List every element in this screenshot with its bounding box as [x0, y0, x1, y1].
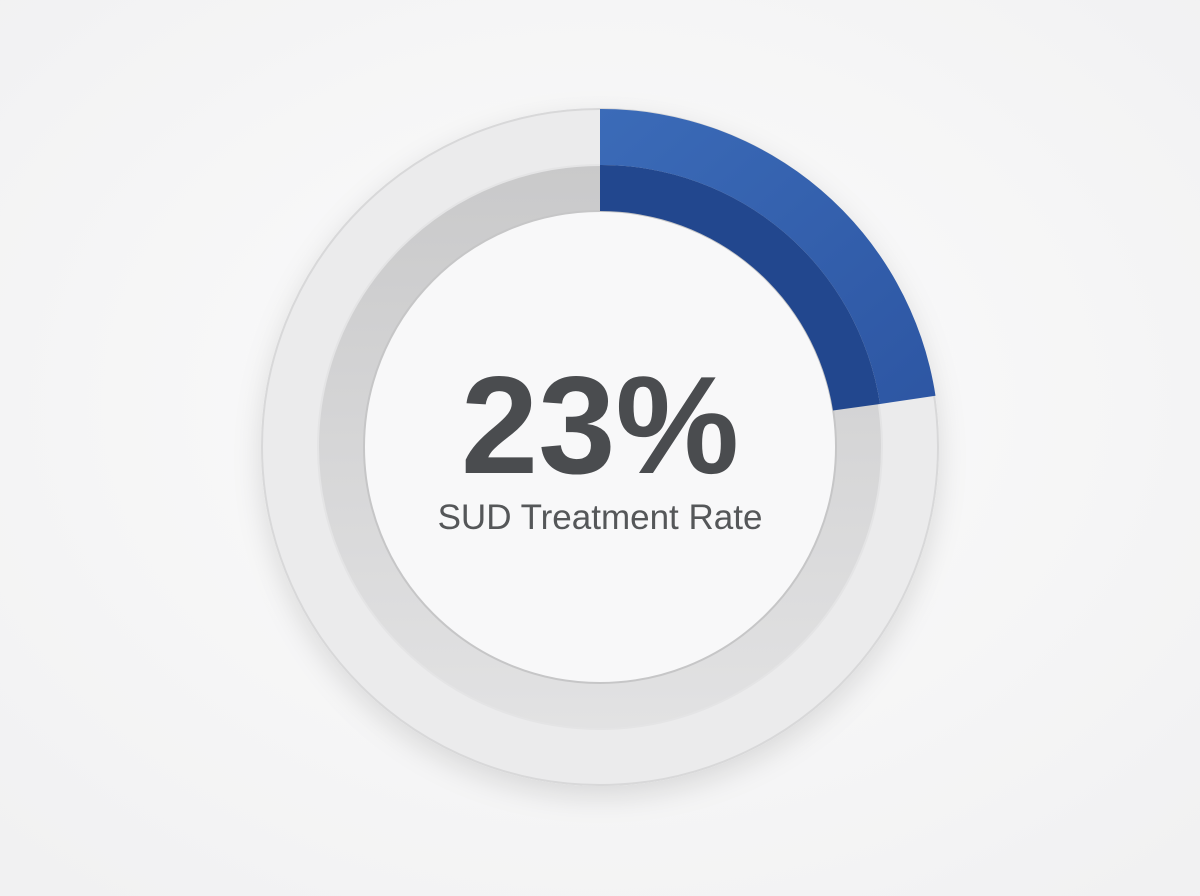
label: SUD Treatment Rate [438, 498, 762, 537]
percentage value: 23% [461, 348, 739, 503]
segment: 23% blue outer [600, 109, 936, 404]
donut chart [262, 109, 938, 785]
ring: gray inner band [318, 165, 882, 729]
ring: gray outer [262, 109, 938, 785]
segment: 23% blue inner [600, 165, 880, 410]
center hole [364, 211, 836, 683]
